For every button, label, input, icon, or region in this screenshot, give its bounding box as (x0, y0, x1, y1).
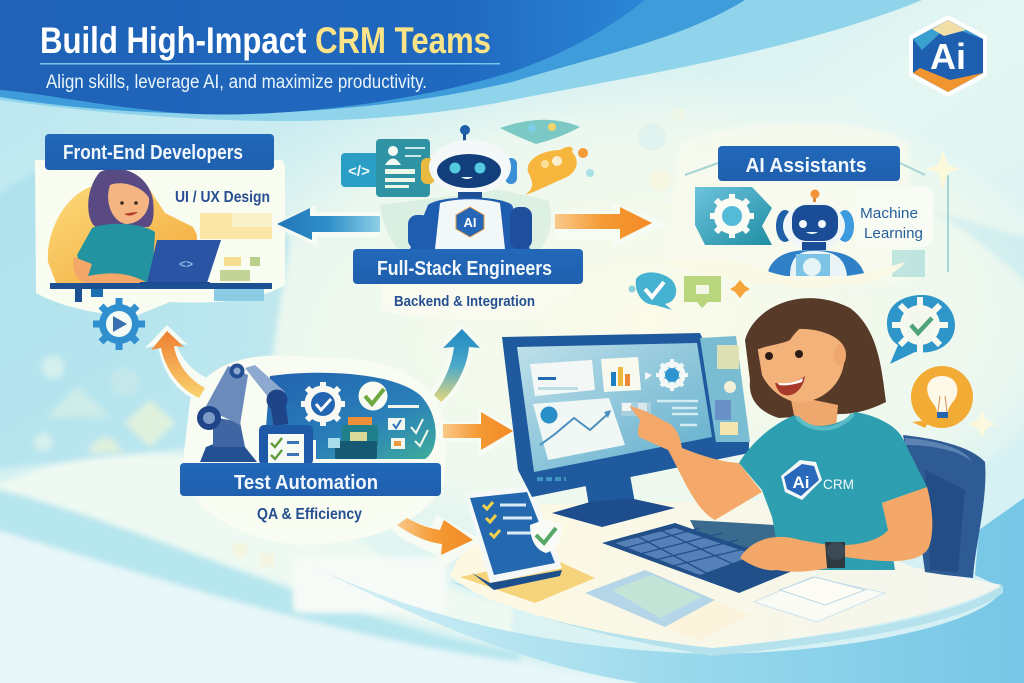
face (757, 329, 844, 402)
arrow: orange to AI assistants (555, 203, 668, 248)
screen (517, 343, 712, 472)
hand on keyboard (740, 537, 845, 572)
illustration: chair (903, 435, 985, 578)
hair back (745, 298, 886, 418)
title underline (40, 63, 500, 64)
icon: checklist tablet (259, 425, 313, 465)
illustration: yellow circle behind developer (48, 187, 197, 283)
right side panel (700, 336, 750, 442)
shadow behind keyboard (690, 520, 790, 560)
bar chart (601, 357, 641, 392)
sub panel (195, 495, 425, 531)
panel: test automation (180, 355, 446, 545)
label: QA & Efficiency (257, 506, 362, 523)
icon: gear play (93, 298, 145, 350)
illustration: robot (408, 125, 532, 249)
desk (50, 283, 272, 302)
decorative blocks (200, 213, 272, 281)
icon: check bubble (358, 382, 419, 410)
t-shirt (739, 412, 927, 570)
connector lines (685, 163, 948, 272)
icon: AI chest badge: AI (464, 215, 476, 230)
icon: toolbox (328, 417, 378, 459)
icon: lightbulb bubble (911, 366, 973, 428)
banner (353, 249, 583, 284)
icon: small checks (388, 418, 428, 449)
desk papers (585, 570, 885, 640)
arrow: orange to monitor (443, 408, 522, 458)
yellow paper under tablet (460, 562, 595, 603)
neck (790, 395, 838, 445)
cream wave under robot (660, 258, 905, 287)
teal side panel (892, 250, 925, 277)
arm pointing (629, 406, 762, 520)
label bubble: Learning (864, 225, 923, 242)
icon: AI hexagon logo: Ai (930, 36, 966, 77)
panel: AI assistants (660, 124, 960, 287)
title: Build High-Impact CRM Teams (40, 20, 491, 61)
icon: shield check (530, 519, 562, 553)
desk (450, 500, 1003, 656)
cream backdrop (665, 124, 910, 284)
dark blob (265, 373, 436, 459)
icon: code tag: </> (348, 163, 370, 180)
shirt logo: Ai (792, 473, 810, 492)
gear tile (695, 187, 772, 245)
illustration: robot arm (197, 364, 288, 462)
arrow: orange to tablet (392, 515, 482, 570)
icon: screen gear (645, 359, 688, 391)
illustration: assistant robot (767, 190, 865, 276)
taskbar (537, 477, 566, 481)
shirt logo (781, 460, 854, 500)
icon: laptop: <> (179, 257, 193, 271)
arrow: blue to front-end (272, 205, 380, 248)
label: UI / UX Design (175, 189, 270, 206)
icon: profile card (376, 139, 430, 197)
icon: AI hexagon logo (909, 15, 987, 97)
ear (834, 344, 846, 366)
icons: small chat row (628, 272, 750, 310)
banner (180, 463, 441, 496)
pale geometric shapes left (47, 387, 110, 417)
label bubble: Machine (860, 205, 918, 222)
label: Backend & Integration (394, 293, 535, 310)
blue band under desk (300, 498, 1024, 683)
fringe (752, 306, 838, 352)
icon: gear check (301, 382, 345, 426)
icon: sparkle (968, 410, 996, 438)
illustration: tablet (465, 486, 562, 590)
sub panel (382, 284, 575, 320)
illustration: developer woman (73, 169, 155, 283)
line chart (533, 398, 625, 460)
icon: leaf shape (500, 120, 580, 144)
arm right (843, 487, 932, 561)
screen card (530, 360, 595, 396)
banner (718, 146, 900, 181)
arrow: orange curved up-left (145, 325, 212, 402)
watch (825, 542, 845, 568)
robot halo (380, 190, 551, 258)
icon: laptop (140, 240, 221, 283)
arrow: blue curved up (430, 323, 485, 408)
illustration: developer woman at desk (629, 298, 932, 570)
heading: Test Automation (234, 472, 378, 494)
heading: AI Assistants (746, 155, 866, 177)
icon: orange thought bubble (525, 147, 594, 195)
illustration: keyboard (602, 523, 845, 593)
illustration: monitor (502, 333, 750, 527)
subtitle: Align skills, leverage AI, and maximize productivity. (46, 72, 427, 93)
icon: sparkle (926, 150, 960, 190)
icon: gear check bubble (887, 295, 955, 364)
label bubble (856, 187, 933, 247)
floating dots (155, 95, 850, 567)
heading: Full-Stack Engineers (377, 258, 552, 280)
panel: full-stack engineers (341, 125, 583, 320)
heading: Front-End Developers (63, 142, 243, 164)
banner (45, 134, 274, 170)
panel: front-end developers (35, 134, 285, 317)
header waves (0, 0, 922, 121)
shirt logo: CRM (823, 476, 854, 492)
icon: code tag (341, 153, 383, 187)
